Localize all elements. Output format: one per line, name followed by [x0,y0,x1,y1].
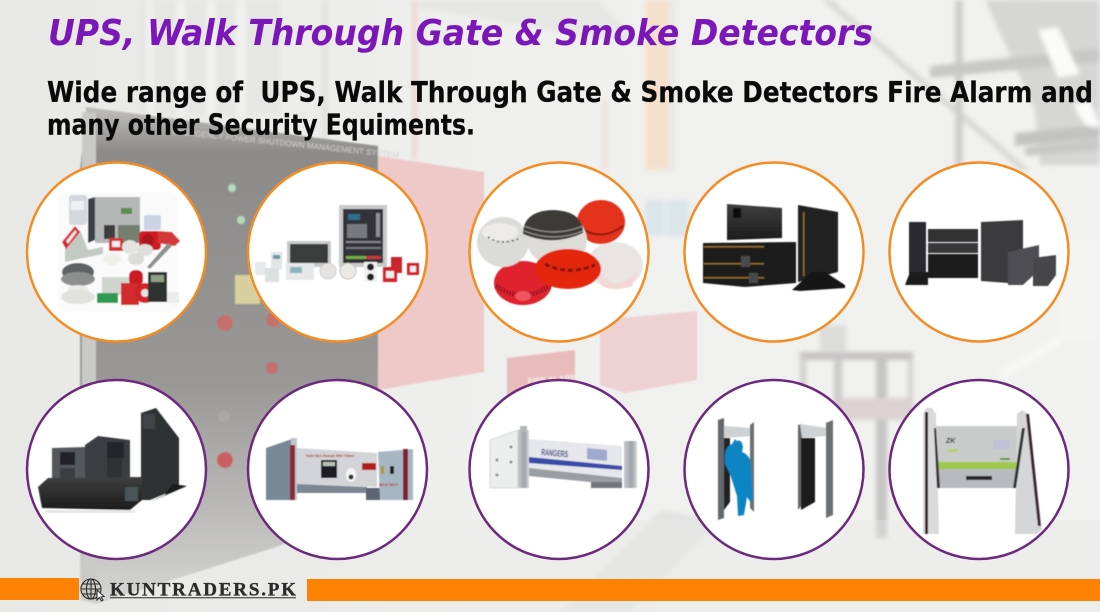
product circle: fire alarm assortment [27,162,206,342]
product circle: APC UPS family [890,162,1068,342]
icon: globe with cursor [81,579,104,601]
product circle: gates with blue person [684,380,864,559]
product circle: ZKTeco gate [890,380,1068,559]
product circle: smoke detectors [470,162,648,342]
background: blurred control room photo: FIRE ALARM [527,373,577,386]
product circle: ZKTeco gate: ZK [945,438,956,445]
cart [800,352,913,360]
product circle: walk through gate control panel: Fade Non Stoupe Mild Trimer [306,454,355,458]
description text [47,76,1093,142]
product circle: fire alarm control panel [248,162,427,342]
title: UPS, Walk Through Gate & Smoke Detectors [48,13,873,54]
footer bar right [307,579,1100,601]
product circle: Rangers walk through gate: RANGERS [541,447,569,459]
description text: many other Security Equiments. [47,108,475,142]
control panel [80,107,378,604]
product circle: walk through gate control panel: MCD 5027 [379,482,399,487]
product circle: Rangers walk through gate [470,380,648,559]
website label: KUNTRADERS.PK [110,580,296,600]
product circle: rack and tower UPS [684,162,864,342]
background: blurred control room photo: EMERGENCY POWER SHUTDOWN MANAGEMENT SYSTEM [172,127,400,160]
product circle: APC Smart-UPS [27,380,206,559]
footer bar left [0,578,79,600]
product circle: walk through gate control panel [248,380,427,559]
